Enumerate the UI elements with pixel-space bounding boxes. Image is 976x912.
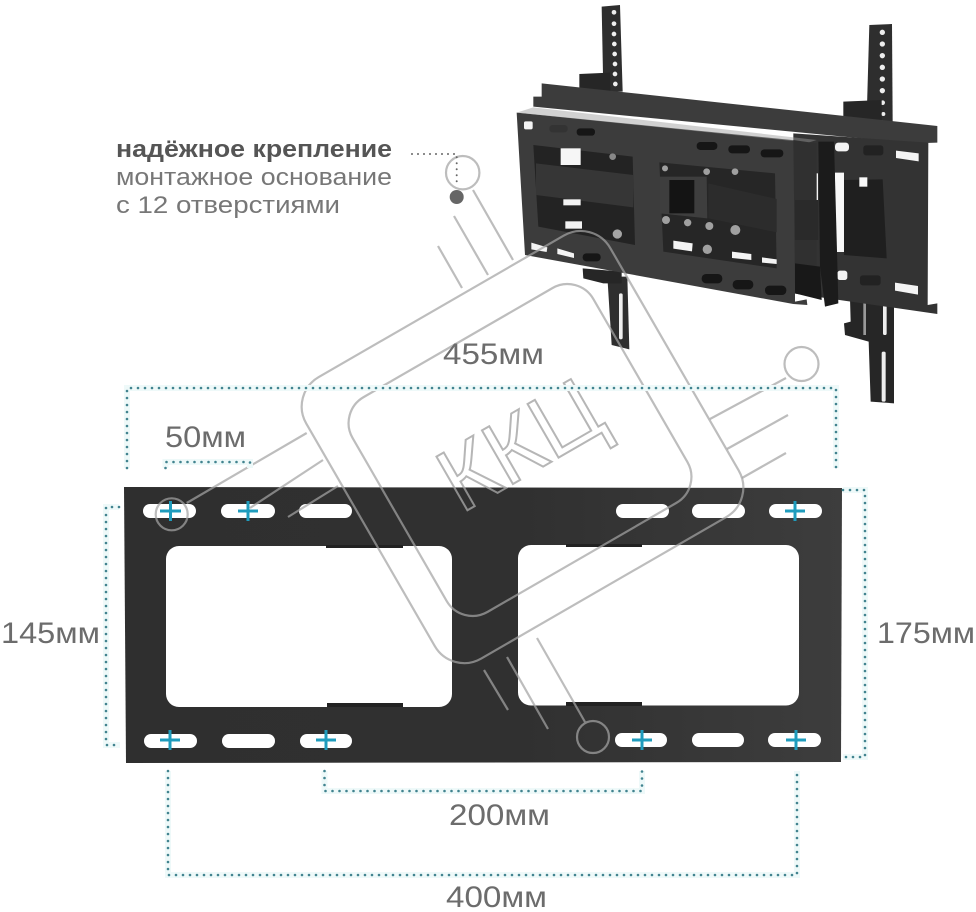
callout text: reliable mounting: с 12 отверстиями [116,192,340,219]
wall plate diagram [124,487,842,763]
left lower upright [583,268,629,349]
dimension: 200 mm [324,771,642,832]
large window right [518,544,799,706]
front plate slots [524,121,786,295]
front plate [517,107,817,305]
right upright top [867,24,893,122]
plate body [124,487,842,763]
right gap and vertical arm [814,173,887,258]
back plate [793,133,937,314]
dimension: 145 mm: 145мм [1,617,100,650]
dimension: 455 mm: 455мм [443,338,544,371]
mounting hole cross markers [160,501,806,750]
left upright top [602,5,623,92]
hinge column [793,140,838,307]
dimension: 455 mm [127,338,836,468]
callout text: reliable mounting: надёжное крепление [116,136,392,163]
right lower upright [844,298,894,403]
callout leader line [412,154,464,204]
front plate left window [533,145,635,245]
front plate right window [659,162,777,268]
mounting slots [143,504,822,748]
dimension: 400 mm [168,771,797,912]
dimension: 200 mm: 200мм [449,799,550,832]
callout text: reliable mounting: монтажное основание [116,164,392,191]
dimension: 50 mm [165,421,250,468]
dimension: 50 mm: 50мм [165,421,246,454]
large window left [166,545,452,707]
callout text: reliable mounting [116,136,392,219]
back plate slots [835,143,919,295]
dimension: 145 mm [1,507,120,745]
watermark: ККЦ [421,359,620,531]
product photo: wall mount bracket [517,5,937,403]
dimension: 175 mm: 175мм [877,617,975,650]
top clamps [579,73,882,132]
watermark [156,156,818,753]
dimension: 175 mm [843,490,975,757]
wall rail [533,83,937,143]
